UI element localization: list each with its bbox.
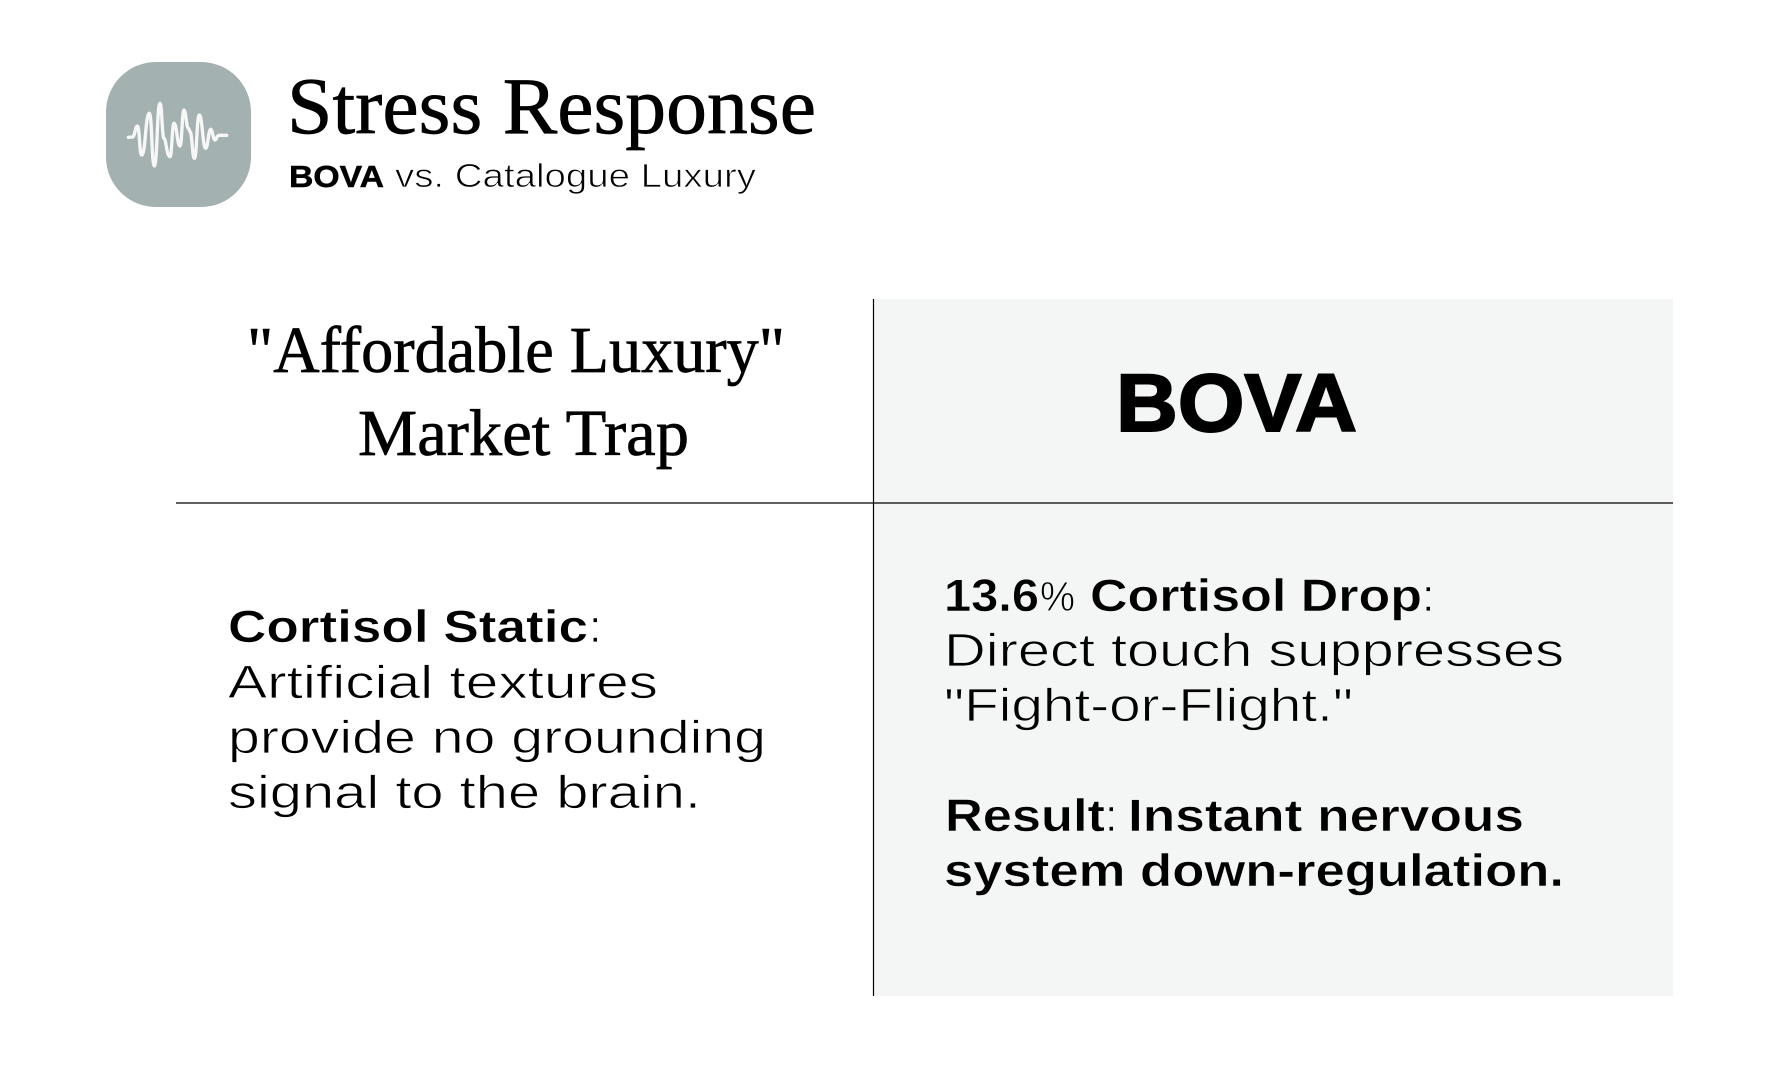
header rule bbox=[176, 502, 1673, 504]
panel: BOVA column background bbox=[874, 299, 1673, 996]
text block: cortisol drop: 13.6 bbox=[944, 570, 1039, 621]
column heading: Affordable Luxury Market Trap: Market Trap bbox=[358, 397, 689, 470]
text block: cortisol static: provide no grounding bbox=[228, 711, 766, 763]
text block: cortisol drop bbox=[944, 570, 1564, 731]
text block: cortisol drop: : bbox=[1422, 570, 1435, 621]
text block: cortisol static: Cortisol Static bbox=[228, 601, 588, 652]
text block: cortisol static: Artificial textures bbox=[228, 656, 658, 708]
text block: result: : bbox=[1105, 790, 1118, 841]
text block: cortisol drop: Cortisol Drop bbox=[1090, 570, 1422, 621]
text block: result: Instant nervous bbox=[1128, 790, 1524, 841]
text block: cortisol static: signal to the brain. bbox=[228, 766, 701, 818]
subtitle: vs. Catalogue Luxury bbox=[395, 157, 757, 194]
icon: sound wave badge bbox=[106, 62, 251, 207]
header bbox=[106, 62, 816, 207]
text block: cortisol drop: % bbox=[1040, 573, 1075, 620]
column divider bbox=[872, 299, 874, 996]
text block: cortisol static bbox=[228, 601, 766, 818]
subtitle bbox=[289, 157, 757, 194]
column heading: Affordable Luxury Market Trap: "Affordable Luxury" bbox=[247, 314, 785, 387]
column heading: BOVA: BOVA bbox=[1116, 358, 1357, 449]
text block: result: system down-regulation. bbox=[944, 845, 1564, 896]
text block: cortisol static: : bbox=[589, 601, 602, 652]
title: Stress Response bbox=[287, 63, 816, 151]
text block: cortisol drop: "Fight-or-Flight." bbox=[944, 679, 1353, 731]
text block: cortisol drop: Direct touch suppresses bbox=[944, 624, 1564, 676]
column heading: Affordable Luxury Market Trap bbox=[247, 314, 785, 470]
text block: result bbox=[944, 790, 1564, 896]
subtitle: BOVA bbox=[289, 159, 384, 194]
text block: result: Result bbox=[945, 790, 1105, 841]
